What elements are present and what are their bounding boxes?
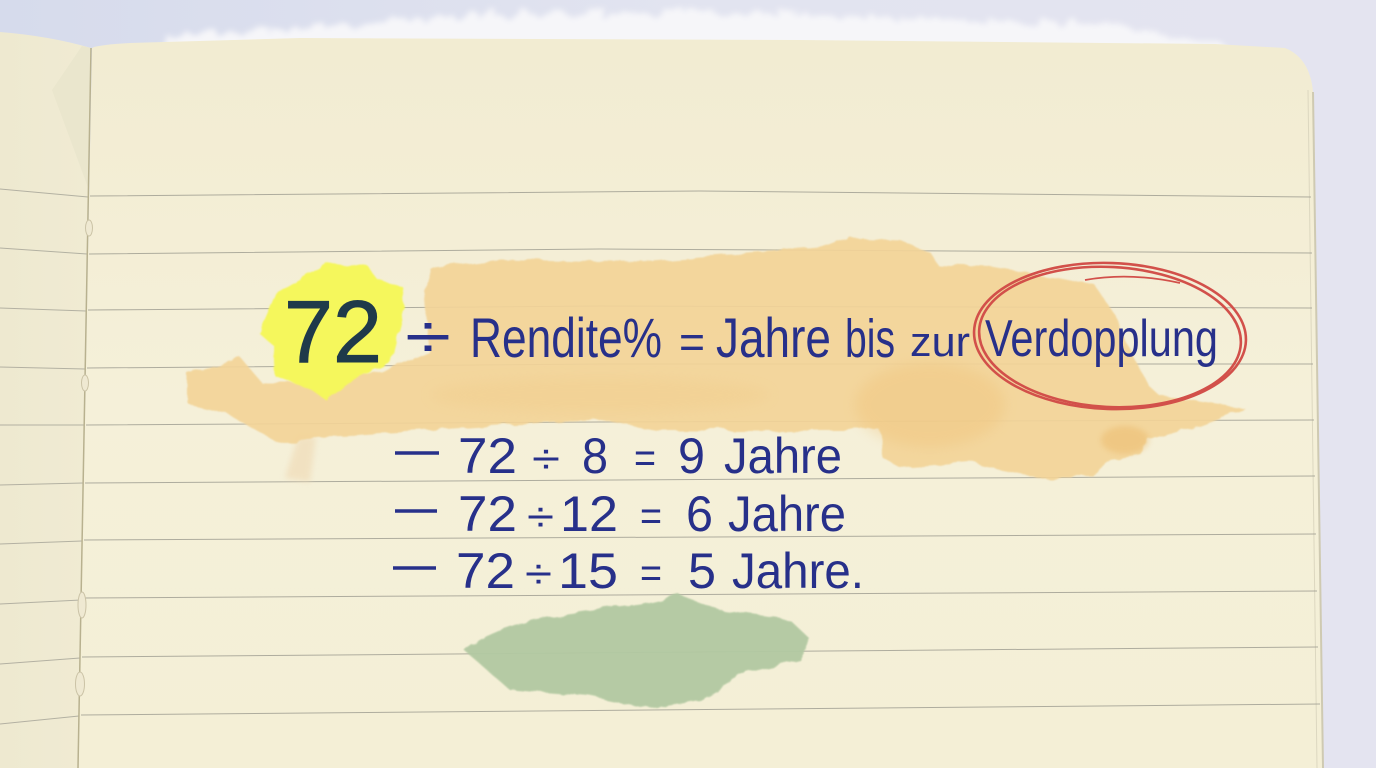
divide sign: ÷ (405, 303, 451, 372)
example 12 percent: ÷ (527, 493, 554, 540)
example 12 percent: Jahre (728, 486, 846, 542)
example 12 percent: = (640, 492, 662, 539)
word Rendite: Rendite% (470, 306, 662, 369)
word Verdopplung: Verdopplung (985, 310, 1218, 368)
example 12 percent: 6 (686, 486, 713, 542)
spine gutter line (78, 48, 91, 768)
example 12 percent: 72 (458, 486, 517, 542)
example 15 percent: 5 (688, 543, 716, 599)
word bis: bis (845, 309, 895, 369)
green watercolor blob (464, 595, 811, 708)
example 15 percent: Jahre. (732, 543, 864, 599)
example 12 percent (395, 486, 846, 542)
white backdrop at the top (135, 12, 1225, 60)
page fold shadow (52, 46, 91, 190)
example calculations (393, 428, 864, 599)
example 8 percent: = (634, 434, 656, 481)
number 72: 72 (284, 282, 382, 381)
example 8 percent: ÷ (532, 435, 560, 482)
example 15 percent (393, 543, 864, 599)
equals sign: = (679, 316, 705, 368)
yellow highlighter behind 72 (259, 262, 405, 400)
example 15 percent: = (640, 549, 662, 596)
example 15 percent: ÷ (525, 550, 552, 597)
red circle around Verdopplung (972, 258, 1248, 414)
example 12 percent: 12 (560, 486, 618, 542)
example 8 percent (395, 428, 842, 484)
heading formula (284, 282, 1218, 381)
example 8 percent: 8 (582, 428, 608, 484)
word Jahre: Jahre (716, 306, 831, 369)
example 8 percent: Jahre (724, 428, 842, 484)
example 15 percent: 72 (456, 543, 515, 599)
orange watercolor wash (187, 238, 1245, 482)
example 8 percent: 72 (458, 428, 517, 484)
example 8 percent: 9 (678, 428, 705, 484)
example 15 percent: 15 (558, 543, 618, 599)
left notebook page (0, 32, 91, 768)
word zur: zur (910, 318, 970, 365)
binding threads (76, 220, 92, 696)
